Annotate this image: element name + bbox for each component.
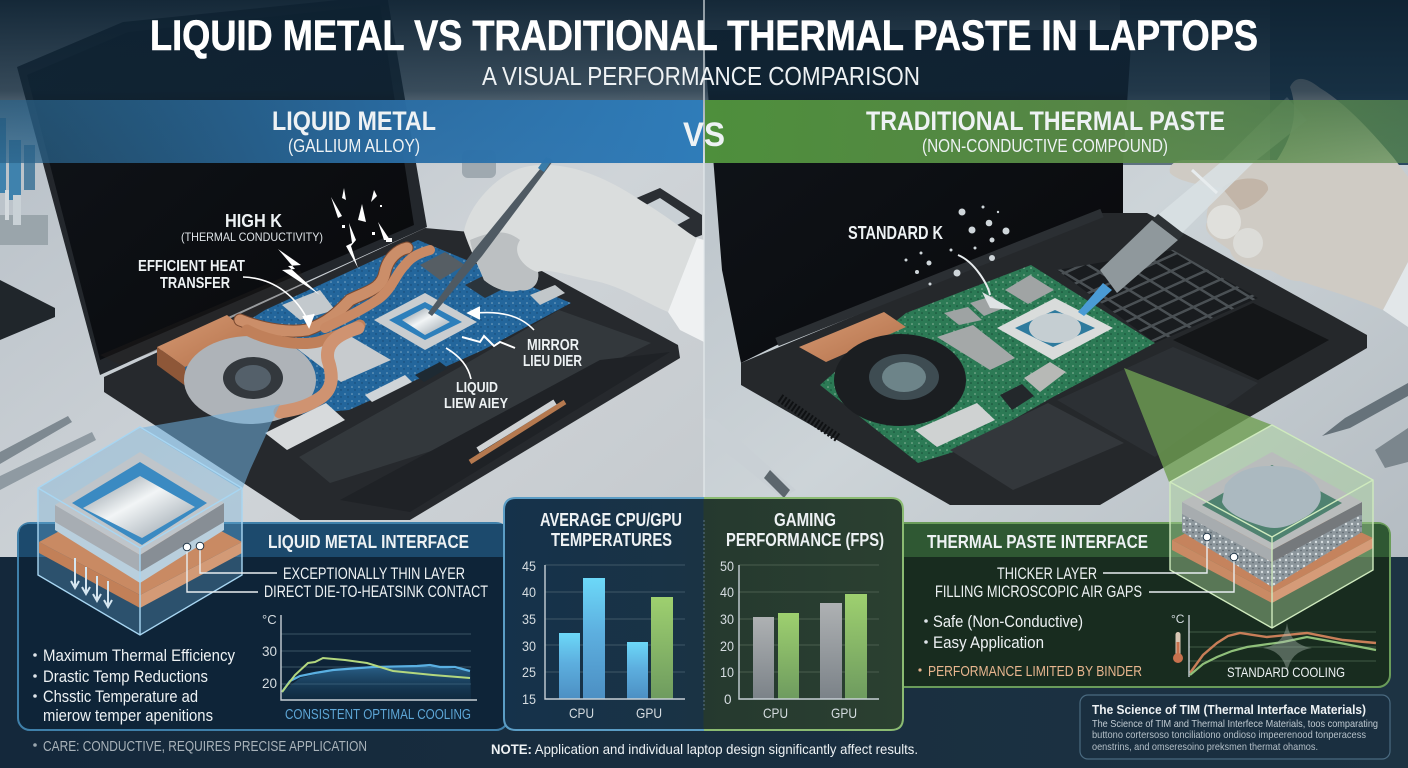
dark palm panels (950, 303, 1329, 490)
line chart: consistent cooling: °C (262, 612, 277, 627)
left annotations (138, 188, 582, 412)
side vents (780, 398, 838, 438)
chart title: gaming (726, 510, 884, 550)
panel: thermal paste interface (880, 523, 1390, 687)
heading: liquid metal: LIQUID METAL (272, 106, 436, 136)
bar chart: temperatures: 45 (522, 559, 536, 574)
paste blob (1222, 466, 1321, 528)
ssd chips (265, 252, 565, 450)
blue ring (72, 462, 207, 545)
liquid metal layer (55, 520, 224, 583)
cooling fan (184, 336, 316, 424)
label: transfer: TRANSFER (160, 275, 230, 292)
chart title: temperatures: TEMPERATURES (551, 530, 672, 550)
warning line: PERFORMANCE LIMITED BY BINDER (928, 663, 1142, 680)
leader dots (1203, 533, 1238, 561)
label: mirror: MIRROR (527, 337, 579, 354)
left laptop (17, 0, 680, 520)
arrow: mirror die (468, 307, 534, 330)
leader dots (183, 542, 204, 551)
line chart: consistent cooling: 20 (262, 676, 277, 691)
chart caption: CONSISTENT OPTIMAL COOLING (285, 706, 471, 723)
laptop base (104, 228, 680, 520)
icon: lightning upper (346, 223, 358, 268)
heat arrows (71, 558, 112, 607)
bar chart: fps: 50 (720, 559, 734, 574)
centre divider (703, 0, 705, 500)
heat pipes (240, 248, 430, 412)
chip frame (1182, 452, 1362, 562)
header band: thermal paste (705, 100, 1408, 163)
chip frame (55, 452, 224, 572)
label: liew aiey: LIEW AIEY (444, 395, 508, 412)
cpu die (374, 293, 477, 350)
laptop base (741, 213, 1367, 505)
vs badge: VS (683, 116, 725, 154)
right annotations (848, 206, 1014, 310)
top shading (0, 0, 1408, 165)
callout text: direct contact: DIRECT DIE-TO-HEATSINK CONTACT (264, 583, 488, 601)
motherboard (820, 265, 1155, 463)
bar chart: fps: CPU (763, 705, 788, 721)
cube: thermal paste layers (1103, 425, 1373, 628)
cube edges (38, 427, 242, 635)
icon: spark shards (331, 188, 392, 242)
paste layer (1182, 513, 1362, 587)
callout beam: thermal paste (1124, 368, 1272, 482)
bullet list: Maximum Thermal Efficiency (43, 646, 235, 665)
laptop screen (17, 0, 427, 375)
line chart: consistent cooling (262, 612, 477, 700)
label: high k: HIGH K (225, 211, 282, 231)
panel body: oenstrins, and omseresoino preksmen thermat ohamos. (1092, 741, 1318, 753)
bar chart: temperatures: CPU (569, 705, 594, 721)
label: lieu dier: LIEU DIER (523, 353, 582, 370)
subheading: non-conductive compound: (NON-CONDUCTIVE COMPOUND) (922, 136, 1168, 156)
line chart: standard cooling: °C (1171, 612, 1185, 626)
left desk props (0, 118, 702, 490)
icon: lightning main (278, 249, 320, 295)
bar chart: fps: 20 (720, 639, 734, 654)
chart title: gaming: GAMING (774, 510, 836, 530)
desk background (0, 0, 1408, 560)
chart caption: STANDARD COOLING (1227, 664, 1345, 680)
bullet list: Drastic Temp Reductions (43, 667, 208, 686)
icon: sparkle (1263, 623, 1312, 673)
panel: comparison charts (504, 498, 903, 730)
cooling fan (834, 334, 966, 426)
bullet list: Easy Application (933, 633, 1044, 652)
leader lines (1103, 537, 1234, 592)
heading: LIQUID METAL INTERFACE (268, 531, 469, 552)
bar chart: temperatures: 15 (522, 692, 536, 707)
subheading: gallium alloy: (GALLIUM ALLOY) (288, 136, 420, 156)
bar chart: fps (720, 559, 879, 721)
callout text: thicker layer: THICKER LAYER (997, 565, 1097, 583)
panel heading: The Science of TIM (Thermal Interface Materials) (1092, 702, 1366, 717)
lower dark background (0, 557, 1408, 768)
arrow: liquid alloy (446, 348, 471, 379)
bullet list: mierow temper apenitions (43, 706, 213, 725)
note: NOTE: Application and individual laptop design significantly affect results. (491, 741, 918, 757)
header band: liquid metal (0, 100, 703, 163)
laptop screen (703, 30, 1132, 363)
cpu with paste (997, 298, 1113, 360)
bullet list: Chsstic Temperature ad (43, 687, 198, 706)
bullet list (924, 612, 1083, 652)
label: efficient heat transfer: EFFICIENT HEAT (138, 258, 245, 275)
copper heatsink (39, 488, 242, 608)
hinge (777, 213, 1102, 342)
icon: particles (904, 206, 1010, 286)
callout text: air gaps: FILLING MICROSCOPIC AIR GAPS (935, 583, 1142, 601)
green die (1202, 465, 1342, 543)
label: standard k: STANDARD K (848, 223, 943, 243)
copper fins (799, 312, 906, 362)
bar chart: fps: 30 (720, 612, 734, 627)
panel body: buttono cortersoso tonciliationo ondioso impeerenood tonperacess (1092, 729, 1366, 741)
subtitle: A VISUAL PERFORMANCE COMPARISON (482, 61, 920, 91)
icon: lightning die (462, 336, 515, 348)
bar chart: temperatures (522, 559, 685, 721)
panel: liquid metal interface (18, 523, 508, 730)
bar chart: temperatures: 35 (522, 612, 536, 627)
line chart: consistent cooling: 30 (262, 644, 277, 659)
panel header band (19, 524, 508, 557)
panel header band (881, 524, 1389, 557)
line chart: standard cooling (1171, 612, 1376, 677)
bar chart: fps: 10 (720, 665, 734, 680)
bar chart: temperatures: 40 (522, 585, 536, 600)
copper base (1172, 490, 1373, 603)
label: liquid: LIQUID (456, 379, 498, 396)
bar chart: temperatures: 30 (522, 639, 536, 654)
left gloved hand with tweezers (428, 157, 704, 342)
chart title: temperatures (540, 510, 682, 550)
panel body (1092, 718, 1378, 753)
chips (915, 275, 1066, 447)
motherboard (170, 240, 571, 417)
cube: liquid metal layers (38, 427, 277, 635)
right desk props (704, 383, 1408, 498)
callout beam: liquid metal (140, 404, 280, 490)
battery (299, 310, 651, 483)
panel: science of tim (1080, 695, 1390, 759)
silver die (83, 476, 195, 538)
care note: CARE: CONDUCTIVE, REQUIRES PRECISE APPLICATION (43, 738, 367, 755)
leader lines (187, 546, 277, 592)
right laptop (703, 30, 1367, 505)
bottom copper strip (470, 402, 565, 462)
cube edges (1170, 425, 1373, 628)
arrow: standard k (958, 255, 1014, 310)
heading: THERMAL PASTE INTERFACE (927, 531, 1148, 552)
bar chart: fps: GPU (831, 705, 857, 721)
chart title: gaming: PERFORMANCE (FPS) (726, 530, 884, 550)
icon: thermometer (1173, 632, 1183, 663)
heading: traditional thermal paste: TRADITIONAL THERMAL PASTE (866, 106, 1225, 136)
copper fin block (157, 315, 253, 367)
bar chart: fps: 40 (720, 585, 734, 600)
bar chart: temperatures: GPU (636, 705, 662, 721)
bar chart: fps: 0 (724, 692, 732, 707)
bar chart: temperatures: 25 (522, 665, 536, 680)
bullet list (33, 646, 235, 725)
arrow: heat transfer (243, 277, 314, 327)
label: thermal conductivity: (THERMAL CONDUCTIVITY) (181, 230, 323, 244)
keyboard (1057, 250, 1258, 343)
right gloved hand with syringe (1078, 79, 1408, 327)
bullet list: Safe (Non-Conductive) (933, 612, 1083, 631)
callout text: thin layer: EXCEPTIONALLY THIN LAYER (283, 565, 465, 583)
chart title: temperatures: AVERAGE CPU/GPU (540, 510, 682, 530)
